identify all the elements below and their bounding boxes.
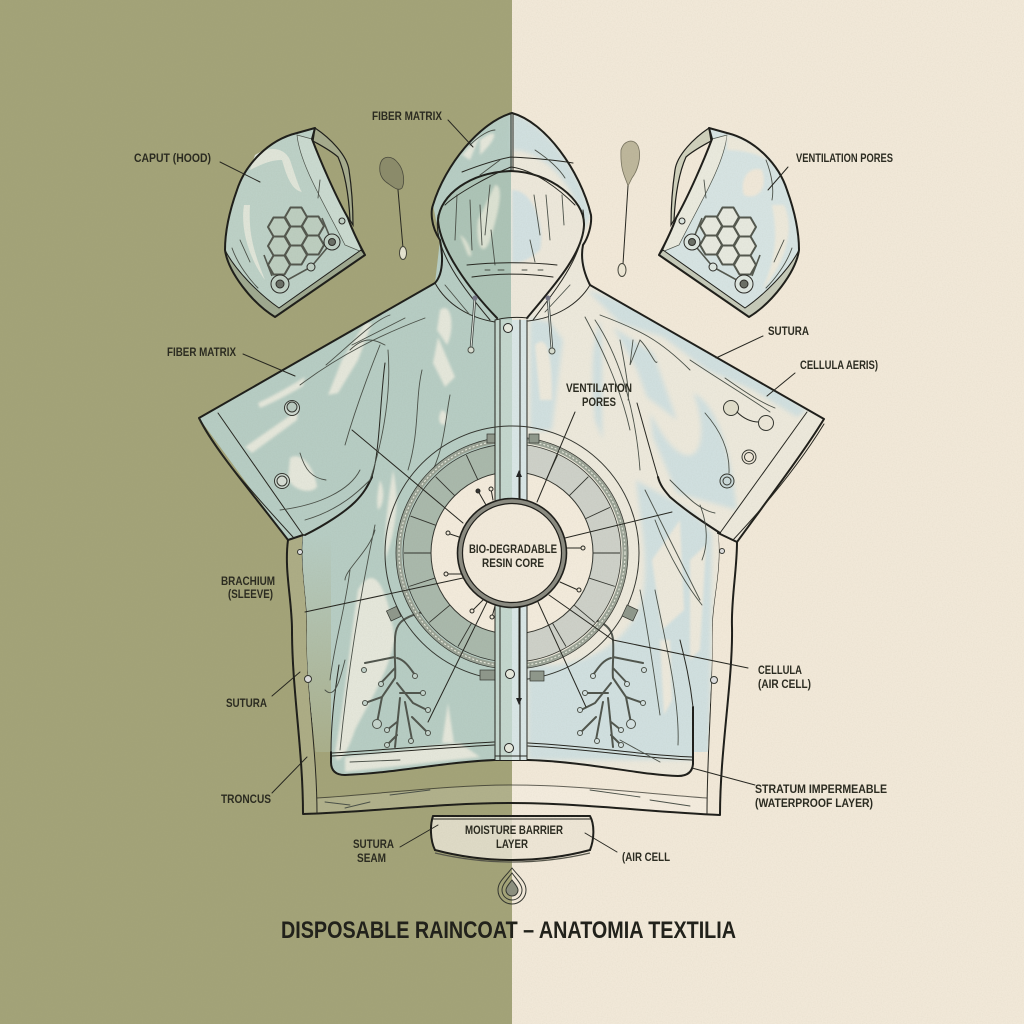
air channel branches right [570,617,646,748]
coat outline [199,113,824,776]
leader lines [220,120,795,852]
raincoat illustration [190,100,842,815]
moisture barrier panel: LAYER [496,839,529,851]
moisture barrier panel [431,816,593,862]
strap [313,128,353,225]
coat body, sleeves and hood fill [200,114,808,774]
labels right: CELLULA [758,665,802,677]
labels left: (SLEEVE) [228,589,273,601]
strap right [671,128,711,225]
labels right: (WATERPROOF LAYER) [755,798,873,810]
labels left: FIBER MATRIX [167,347,236,359]
labels right: STRATUM IMPERMEABLE [755,784,887,796]
labels left: FIBER MATRIX [372,111,442,123]
labels left [134,111,442,865]
side strips and bottom band of coat [287,535,737,815]
labels right: (AIR CELL [622,852,670,864]
core label: BIO-DEGRADABLE [469,544,557,556]
detached hood right [659,128,799,317]
detached hood left [225,128,365,317]
moisture barrier panel: MOISTURE BARRIER [465,825,564,837]
honeycomb patch right [700,208,756,274]
placket passing over ring [495,430,527,698]
labels right [566,153,893,864]
swatch pendant right [618,141,640,276]
core spokes [444,487,585,619]
labels left: CAPUT (HOOD) [134,153,211,165]
core label: RESIN CORE [482,558,544,570]
labels right: PORES [582,397,616,409]
ring clamps [386,434,638,681]
labels left: TRONCUS [221,794,271,806]
labels right: (AIR CELL) [758,679,811,691]
ring segment dividers [404,455,620,647]
labels right: VENTILATION PORES [796,153,893,165]
air channel branches left [362,612,430,748]
labels right: CELLULA AERIS) [800,360,878,372]
fold lines [280,130,775,762]
drawstrings [468,296,555,354]
core disc [458,498,566,608]
labels right: SUTURA [768,326,809,338]
title: DISPOSABLE RAINCOAT – ANATOMIA TEXTILIA [281,917,736,944]
bio-degradable resin core diagram [385,426,639,698]
honeycomb patch [268,208,324,274]
labels left: BRACHIUM [221,576,275,588]
labels right: VENTILATION [566,383,632,395]
swatch pendant left [380,157,406,260]
icon: water drop [498,868,526,904]
sleeve snaps [274,400,774,684]
placket with snaps and arrows [495,317,528,760]
labels left: SEAM [357,853,386,865]
labels left: SUTURA [353,839,394,851]
hood interior [438,171,584,318]
labels left: SUTURA [226,698,267,710]
